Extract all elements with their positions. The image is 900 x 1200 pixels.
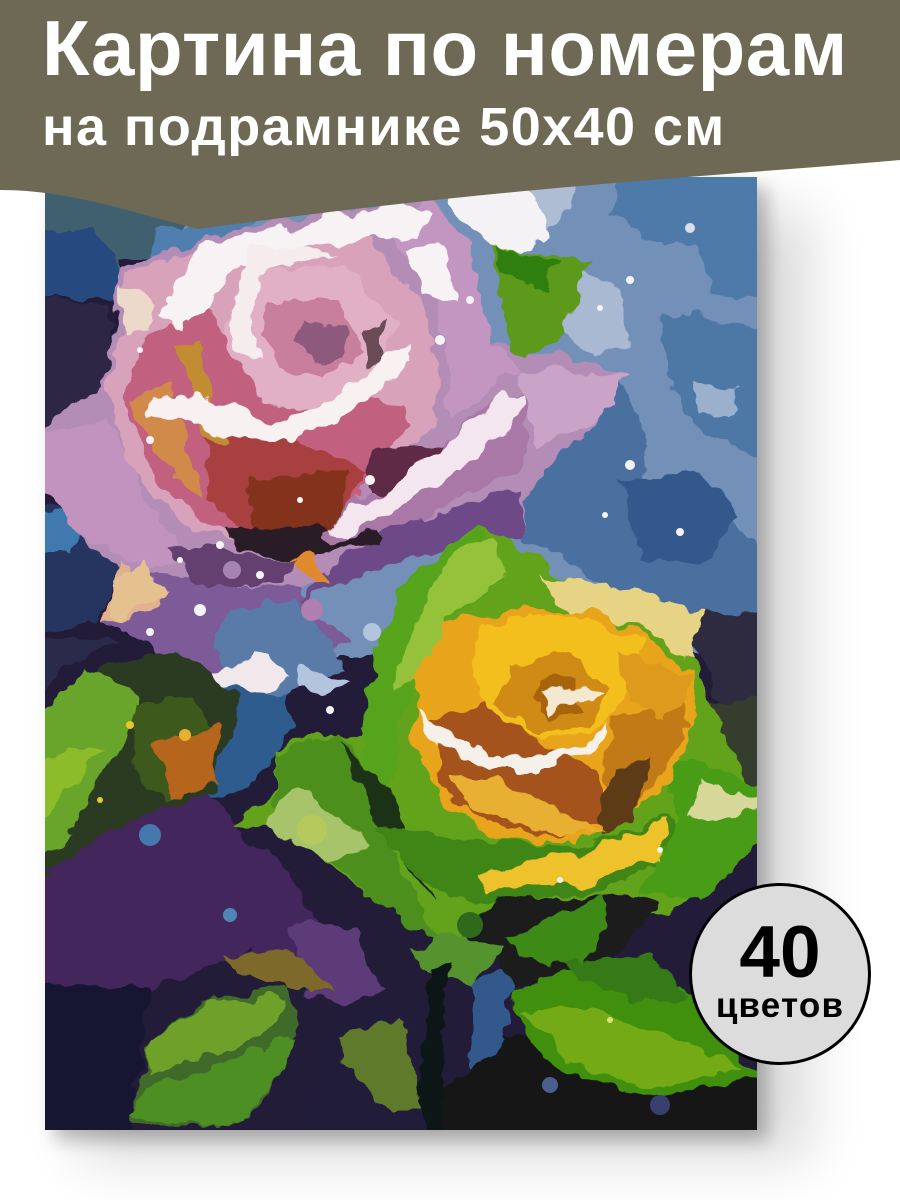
- water drops and paint specks: [97, 223, 695, 1115]
- lower leaves: [410, 895, 770, 1100]
- yellow rose with green calyx: [235, 520, 770, 950]
- title: Картина по номерам: [42, 4, 848, 92]
- pink rose: [35, 175, 630, 695]
- painting: two roses: [35, 165, 770, 1140]
- bottom left leaves: [130, 950, 450, 1140]
- badge: 40 colours: [689, 883, 871, 1065]
- leaf behind pink rose: [490, 250, 590, 355]
- banner: [0, 0, 900, 229]
- left leaf: [35, 650, 240, 880]
- subtitle: на подрамнике 50х40 см: [42, 97, 726, 157]
- canvas shadow: [55, 187, 810, 1160]
- badge label: цветов: [716, 986, 844, 1025]
- painting background: sky: [35, 165, 770, 1140]
- badge number: 40: [739, 912, 821, 993]
